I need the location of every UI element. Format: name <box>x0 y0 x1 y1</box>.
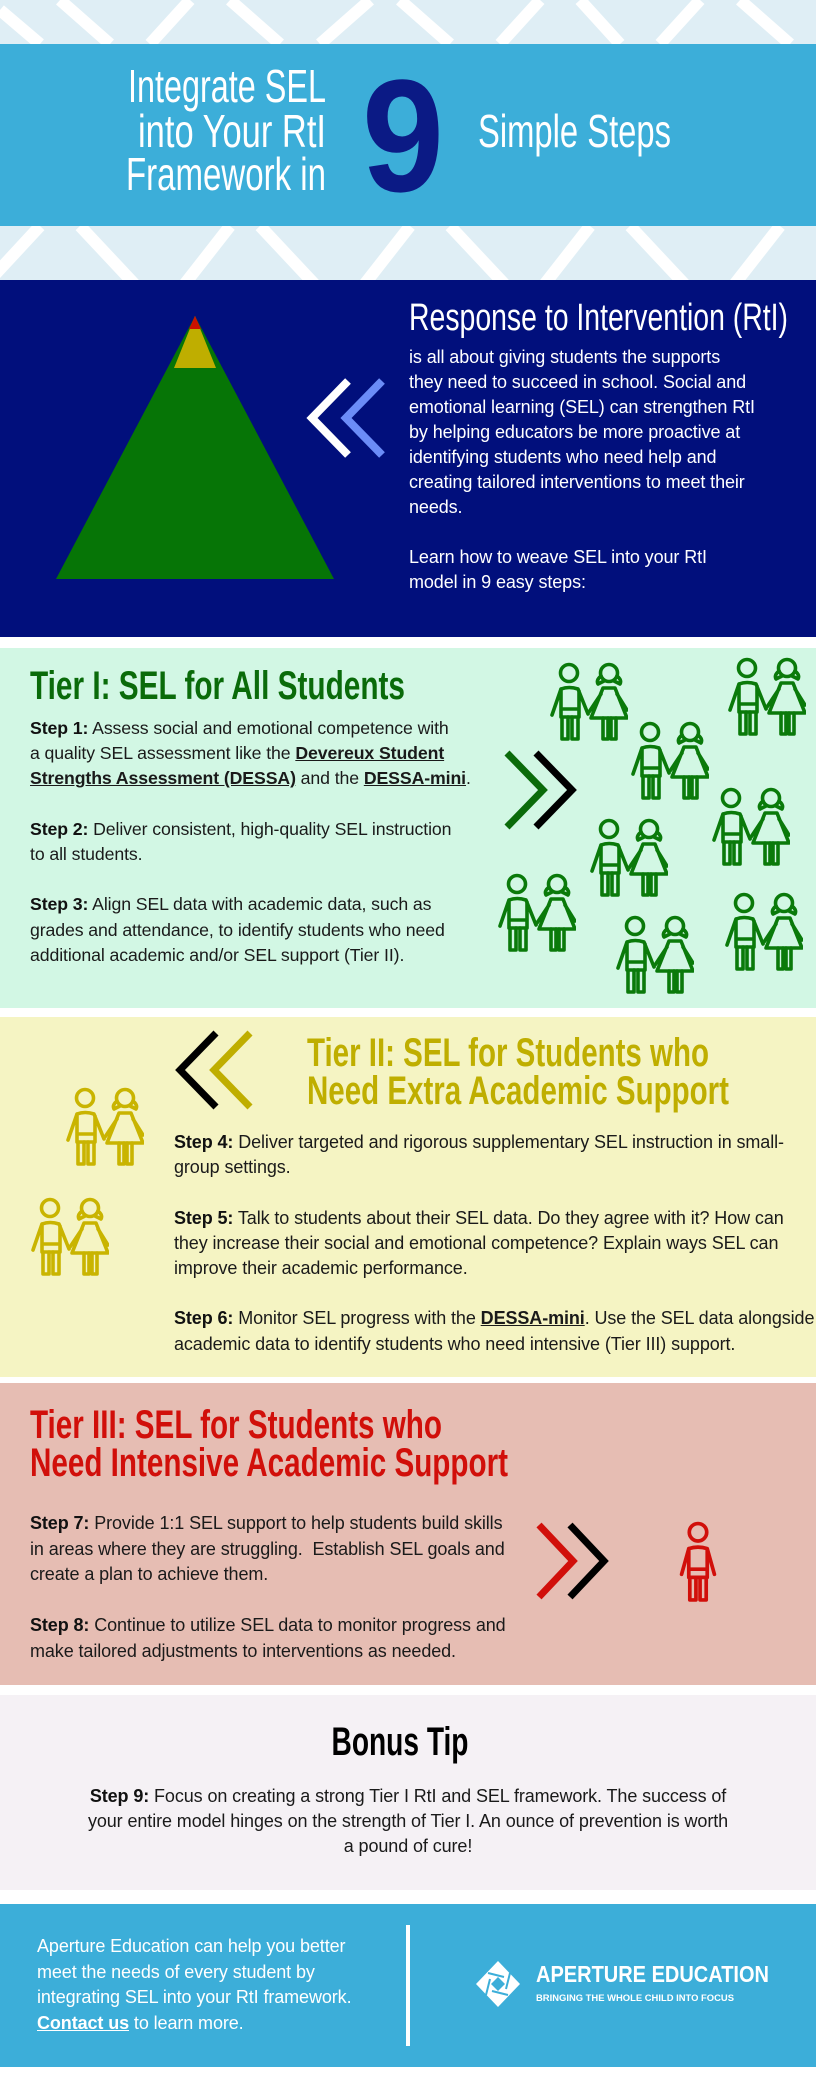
intro text: they need to succeed in school. Social and <box>409 372 746 392</box>
steps 1-3: to all students. <box>30 844 142 864</box>
title <box>126 46 671 225</box>
steps 7-8: Step 8: Continue to utilize SEL data to monitor progress and <box>30 1615 506 1635</box>
intro text <box>409 347 755 592</box>
intro text: Learn how to weave SEL into your RtI <box>409 547 707 567</box>
steps 7-8: in areas where they are struggling. Establish SEL goals and <box>30 1538 505 1558</box>
steps 7-8: make tailored adjustments to interventions as needed. <box>30 1640 456 1660</box>
steps 1-3: a quality SEL assessment like the Devereux Student <box>30 743 444 763</box>
panel: intro RtI <box>0 280 816 637</box>
steps 1-3: Step 1: Assess social and emotional competence with <box>30 718 449 738</box>
title: Simple Steps <box>478 105 671 157</box>
footer text: meet the needs of every student by <box>37 1962 315 1982</box>
steps 4-6 <box>174 1132 814 1354</box>
arrow: double chevron right <box>536 1522 609 1600</box>
step 9 text: your entire model hinges on the strength of Tier I. An ounce of prevention is worth <box>88 1811 728 1831</box>
footer <box>0 1904 816 2067</box>
steps 4-6: Step 4: Deliver targeted and rigorous supplementary SEL instruction in small- <box>174 1132 784 1152</box>
brand name: BRINGING THE WHOLE CHILD INTO FOCUS <box>536 1993 734 2003</box>
step 9 text: Step 9: Focus on creating a strong Tier I RtI and SEL framework. The success of <box>90 1786 726 1806</box>
steps 4-6: academic data to identify students who need intensive (Tier III) support. <box>174 1334 735 1354</box>
icons: student pairs <box>31 1088 144 1276</box>
intro text: creating tailored interventions to meet their <box>409 472 745 492</box>
intro text: by helping educators be more proactive at <box>409 422 740 442</box>
footer text: integrating SEL into your RtI framework. <box>37 1987 351 2007</box>
decorative top pattern <box>0 0 816 280</box>
title: into Your RtI <box>138 105 326 157</box>
steps 4-6: group settings. <box>174 1157 291 1177</box>
panel: Tier I <box>0 648 816 1008</box>
heading <box>307 1031 729 1113</box>
heading <box>30 1403 508 1485</box>
big number 9: 9 <box>362 46 444 225</box>
steps 1-3 <box>30 718 471 965</box>
step 9 text: a pound of cure! <box>344 1836 472 1856</box>
steps 4-6: Step 6: Monitor SEL progress with the DESSA-mini. Use the SEL data alongside <box>174 1308 814 1328</box>
arrow: double chevron left <box>175 1030 252 1110</box>
arrow: double chevron right <box>504 750 577 830</box>
icon: aperture diamond <box>476 1961 520 2007</box>
steps 1-3: Step 2: Deliver consistent, high-quality SEL instruction <box>30 819 451 839</box>
step 9 text <box>88 1786 728 1856</box>
intro text: is all about giving students the supports <box>409 347 720 367</box>
steps 7-8 <box>30 1513 506 1661</box>
steps 7-8: create a plan to achieve them. <box>30 1564 268 1584</box>
arrow: double chevron left <box>306 378 385 458</box>
title: Integrate SEL <box>128 60 326 112</box>
steps 1-3: Strengths Assessment (DESSA) and the DESSA-mini. <box>30 768 471 788</box>
intro text: needs. <box>409 497 462 517</box>
steps 4-6: they increase their social and emotional competence? Explain ways SEL can <box>174 1233 778 1253</box>
intro text: model in 9 easy steps: <box>409 572 586 592</box>
steps 1-3: grades and attendance, to identify students who need <box>30 920 445 940</box>
steps 1-3: additional academic and/or SEL support (Tier II). <box>30 945 404 965</box>
steps 4-6: Step 5: Talk to students about their SEL data. Do they agree with it? How can <box>174 1208 784 1228</box>
brand name <box>536 1961 769 2003</box>
footer text: Contact us to learn more. <box>37 2012 244 2032</box>
intro text: identifying students who need help and <box>409 447 716 467</box>
panel: bonus tip <box>0 1695 816 1890</box>
steps 1-3: Step 3: Align SEL data with academic data, such as <box>30 894 431 914</box>
steps 7-8: Step 7: Provide 1:1 SEL support to help students build skills <box>30 1513 502 1533</box>
icon: single student <box>680 1522 716 1602</box>
footer text <box>37 1936 351 2032</box>
logo <box>476 1961 769 2007</box>
header band <box>0 44 816 226</box>
icons: students group <box>498 658 806 994</box>
panel: Tier II <box>0 1017 816 1377</box>
panel: Tier III <box>0 1383 816 1685</box>
footer text: Aperture Education can help you better <box>37 1936 345 1956</box>
pyramid <box>56 316 334 579</box>
intro text: emotional learning (SEL) can strengthen RtI <box>409 397 755 417</box>
title: Framework in <box>126 148 326 200</box>
steps 4-6: improve their academic performance. <box>174 1258 468 1278</box>
divider <box>406 1925 410 2046</box>
